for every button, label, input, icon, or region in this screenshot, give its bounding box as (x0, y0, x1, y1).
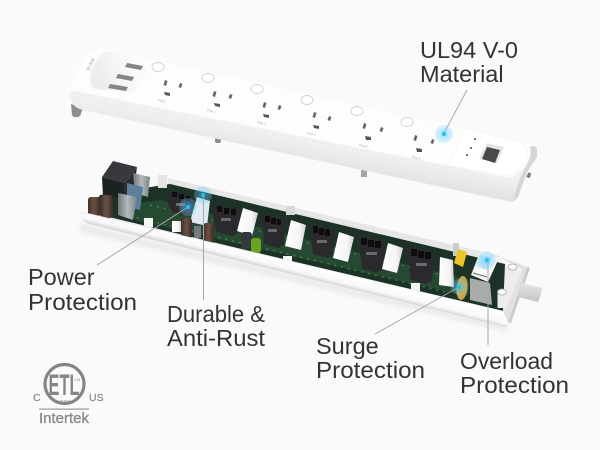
callout: overload protection: Overload (460, 348, 553, 374)
power switch display (479, 143, 504, 163)
callout: surge protection (316, 279, 467, 383)
cover feet (71, 104, 531, 178)
callout: surge protection: Protection (316, 357, 425, 383)
certification logo: ETL Intertek (33, 364, 104, 427)
socket clips (167, 190, 435, 284)
USB connectors (118, 173, 150, 220)
callout: durable and anti-rust: Durable & (167, 301, 265, 327)
outlet 4 (301, 96, 332, 137)
cover body (70, 49, 537, 202)
callout: power protection: Protection (28, 289, 137, 315)
callout: overload protection (460, 251, 569, 398)
USB ports (108, 63, 143, 91)
black input module (102, 161, 137, 198)
USB recess (90, 51, 150, 93)
certification logo: ETL Intertek: LISTED (58, 400, 71, 404)
white relays (172, 197, 454, 287)
yellow components (454, 249, 469, 301)
tray soft shadow (80, 214, 509, 332)
outlet 3 (251, 84, 282, 126)
brand mark: tp-link (85, 57, 97, 72)
outlet 2: Plug 2 (207, 108, 216, 114)
end panel raised area (447, 128, 527, 176)
tray front lip (82, 212, 509, 327)
outlet 5: Plug 5 (359, 143, 368, 149)
callout: durable and anti-rust (167, 186, 265, 351)
power strip top cover (70, 49, 537, 202)
outlet 5 (351, 106, 384, 149)
certification logo: ETL Intertek: ETL (48, 369, 80, 402)
outlet 2 (202, 74, 232, 114)
callout: power protection: Power (28, 264, 95, 290)
callout: UL94 V-0 material: UL94 V-0 (420, 37, 518, 63)
open tray with circuit board (80, 161, 542, 332)
callout: UL94 V-0 material: Material (420, 61, 504, 87)
outlet 6 (401, 118, 434, 161)
outlet 1: Plug 1 (158, 98, 167, 104)
power cord stub (518, 283, 542, 302)
outlet 3: Plug 3 (257, 120, 266, 126)
outlet 6: Plug 6 (412, 155, 421, 161)
circuit board (88, 184, 505, 312)
certification logo: ETL Intertek: Intertek (39, 411, 90, 427)
cover right end cap (513, 146, 537, 202)
certification logo: ETL Intertek: CM (74, 377, 80, 382)
tray end wall (500, 257, 530, 323)
outlet 4: Plug 4 (307, 131, 316, 137)
certification logo: ETL Intertek: US (89, 392, 104, 404)
board connectors (144, 218, 420, 291)
tray back wall (150, 175, 530, 300)
input capacitors (88, 195, 113, 218)
callout: overload protection: Protection (460, 372, 569, 398)
cover front bevel (70, 88, 537, 202)
screw posts (498, 264, 517, 308)
certification logo: ETL Intertek: C (33, 392, 41, 404)
callout: surge protection: Surge (316, 333, 379, 359)
control buttons (466, 138, 476, 156)
callout: UL94 V-0 material (420, 37, 518, 143)
callout: durable and anti-rust: Anti-Rust (167, 325, 265, 351)
board traces (130, 205, 455, 293)
socket openings (172, 192, 431, 266)
overload switch (470, 252, 499, 305)
capacitors on board (181, 218, 261, 253)
outlet 1 (152, 62, 182, 104)
cover top face (70, 49, 529, 177)
rear pins (158, 175, 459, 256)
callout: power protection (28, 198, 197, 315)
